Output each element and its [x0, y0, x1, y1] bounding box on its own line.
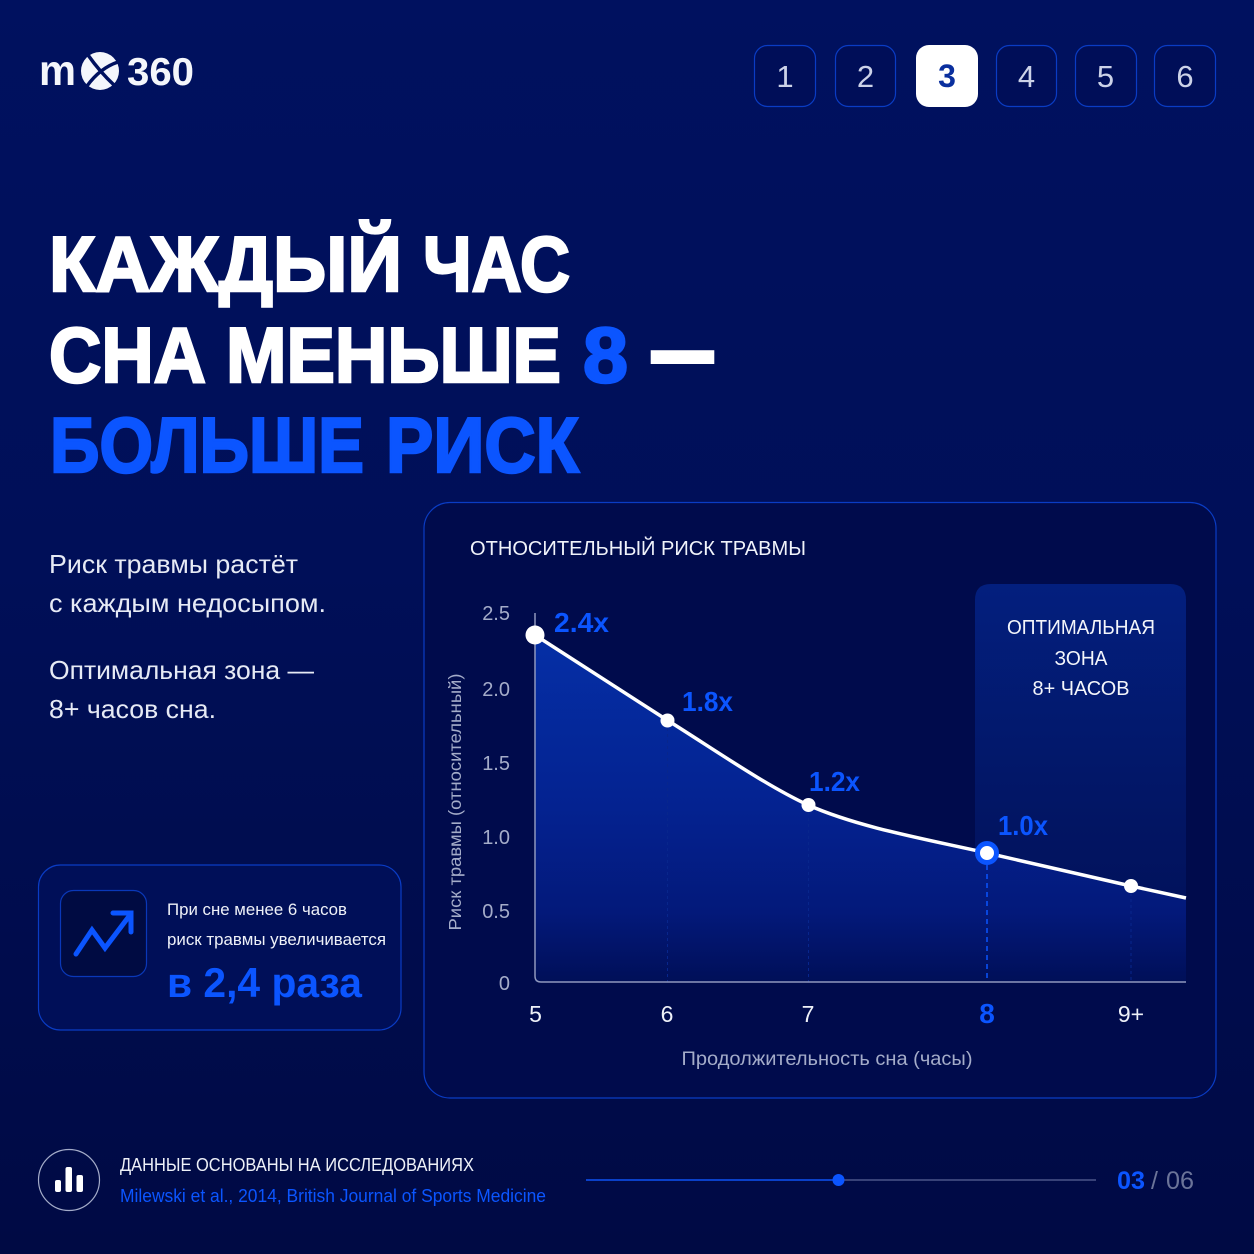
x axis labels: 9+: [1118, 1001, 1144, 1027]
x axis labels: [529, 998, 1144, 1029]
value labels: 1.0x: [998, 810, 1048, 841]
step 6: 6: [1176, 59, 1194, 94]
page counter: 06: [1166, 1167, 1194, 1195]
dashed marker at 8 hours: [986, 865, 988, 982]
panel: injury risk chart: [424, 502, 1216, 1098]
icon: bar chart: [38, 1150, 100, 1210]
step navigation: [754, 45, 1216, 107]
y axis labels: 1.5: [482, 753, 510, 775]
callout: risk 2.4x: в 2,4 раза: [167, 959, 363, 1006]
step 4: 4: [1018, 59, 1035, 94]
title: ЧАС: [423, 220, 570, 308]
value labels: 1.2x: [809, 766, 860, 797]
step 4: [996, 46, 1056, 106]
progress bar: [586, 1174, 1096, 1186]
step 5: [1076, 46, 1136, 106]
x axis title: Продолжительность сна (часы): [682, 1048, 972, 1070]
risk curve: [535, 635, 1186, 898]
step 6: [1154, 46, 1216, 106]
optimal zone band: 8+ ЧАСОВ: [1032, 678, 1130, 700]
optimal zone band: [975, 584, 1186, 982]
y axis labels: 2.0: [482, 679, 510, 701]
step 3 active: [916, 45, 978, 107]
logo: m: [39, 47, 76, 95]
callout: risk 2.4x: При сне менее 6 часов: [167, 900, 347, 919]
callout: risk 2.4x: [38, 865, 401, 1030]
optimal zone band: ЗОНА: [1054, 648, 1108, 670]
y axis labels: [482, 603, 510, 995]
step 3 active: 3: [938, 58, 956, 94]
page counter: 03: [1117, 1167, 1145, 1195]
x axis labels: 8: [979, 998, 995, 1029]
title: СНА: [49, 311, 206, 399]
chart title: ОТНОСИТЕЛЬНЫЙ РИСК ТРАВМЫ: [470, 536, 806, 560]
axes: [535, 613, 1186, 982]
y axis title: Риск травмы (относительный): [445, 674, 465, 930]
step 1: [754, 46, 816, 106]
value labels: [554, 607, 1048, 841]
title: КАЖДЫЙ: [49, 220, 402, 308]
step 2: 2: [857, 59, 874, 94]
description text: с каждым недосыпом.: [49, 588, 326, 618]
step 5: 5: [1097, 59, 1114, 94]
faint guide lines: [668, 728, 1131, 982]
y axis labels: 0.5: [482, 901, 510, 923]
optimal zone band: ОПТИМАЛЬНАЯ: [1007, 617, 1155, 639]
title: МЕНЬШЕ: [226, 311, 561, 399]
x axis labels: 6: [661, 1001, 673, 1027]
logo: [39, 47, 194, 95]
title: 8: [583, 311, 628, 399]
logo: 360: [127, 51, 194, 94]
title: [49, 220, 712, 489]
y axis labels: 0: [499, 973, 510, 995]
description text: Оптимальная зона —: [49, 655, 314, 685]
y axis labels: 2.5: [482, 603, 510, 625]
title: БОЛЬШЕ: [50, 401, 364, 489]
description text: 8+ часов сна.: [49, 694, 216, 724]
value labels: 2.4x: [554, 607, 609, 638]
title: РИСК: [386, 401, 579, 489]
footer source: Milewski et al., 2014, British Journal of Sports Medicine: [120, 1186, 546, 1206]
step 2: [836, 46, 896, 106]
value labels: 1.8x: [682, 686, 733, 717]
page counter: /: [1151, 1167, 1158, 1195]
title: —: [653, 307, 712, 395]
area under curve: [535, 635, 1186, 982]
callout: risk 2.4x: риск травмы увеличивается: [167, 930, 386, 949]
footer source: [38, 1150, 546, 1210]
x axis labels: 5: [529, 1001, 542, 1027]
footer source: ДАННЫЕ ОСНОВАНЫ НА ИССЛЕДОВАНИЯХ: [120, 1155, 474, 1175]
icon: trend arrow: [60, 890, 146, 976]
x axis labels: 7: [802, 1001, 814, 1027]
data points: [526, 626, 1138, 893]
page counter: [1117, 1167, 1194, 1195]
description text: Риск травмы растёт: [49, 549, 298, 579]
y axis labels: 1.0: [482, 827, 510, 849]
step 1: 1: [776, 59, 794, 94]
description text: [49, 549, 326, 724]
